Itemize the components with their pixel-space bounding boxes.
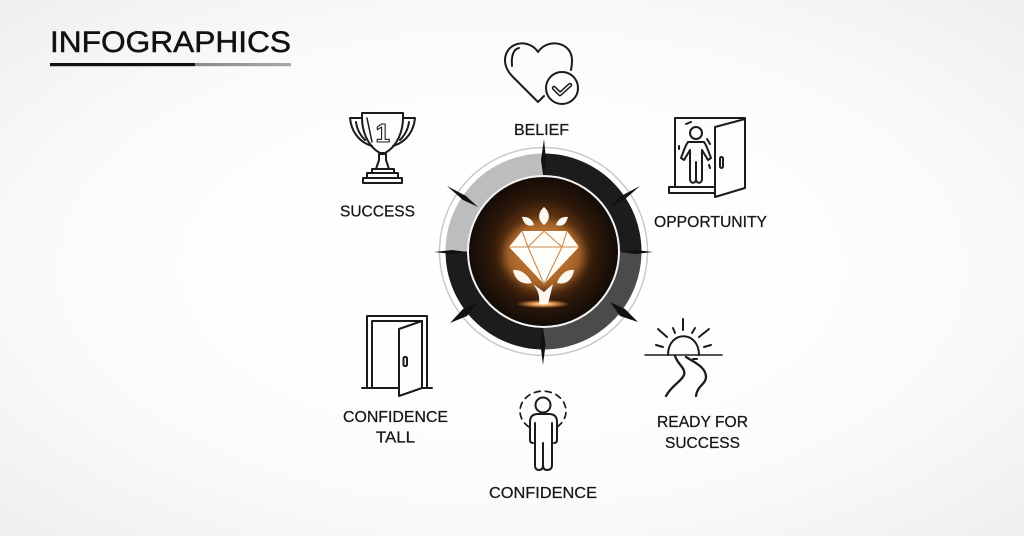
- label: confidence tall: CONFIDENCE: [343, 409, 448, 426]
- label: success: SUCCESS: [340, 204, 415, 220]
- icon: sunrise with road: [645, 319, 722, 396]
- label: confidence tall: [343, 409, 448, 446]
- leaves: [513, 207, 574, 304]
- icon: diamond with leaves: [504, 207, 584, 308]
- icon: person at open door: [669, 118, 745, 197]
- label: opportunity: OPPORTUNITY: [654, 214, 767, 231]
- trophy number: 1: [376, 118, 390, 148]
- wheel spikes: [434, 139, 653, 365]
- central wheel: [434, 139, 653, 365]
- label: confidence: CONFIDENCE: [489, 485, 597, 502]
- label: confidence tall: TALL: [376, 430, 415, 446]
- label: belief: BELIEF: [514, 122, 569, 139]
- label: ready for success: SUCCESS: [665, 435, 740, 452]
- wheel segments: [446, 154, 642, 350]
- title: INFOGRAPHICS: [50, 26, 291, 59]
- icon: heart with check: [505, 43, 578, 104]
- icon: confident person: [520, 391, 566, 470]
- icon: trophy: [350, 113, 415, 183]
- label: ready for success: [657, 414, 748, 452]
- icon: open door: [362, 316, 432, 396]
- label: ready for success: READY FOR: [657, 414, 748, 431]
